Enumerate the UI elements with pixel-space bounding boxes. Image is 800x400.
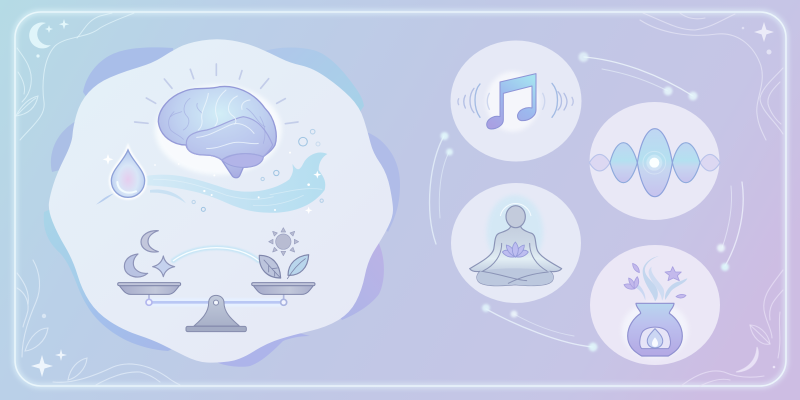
icon: music note xyxy=(458,72,573,132)
corner ornament: bottom left xyxy=(17,260,180,385)
temporal lobe xyxy=(186,117,273,160)
note shape xyxy=(487,74,536,129)
circle: aroma diffuser xyxy=(590,245,720,365)
icon: water wave xyxy=(96,129,327,214)
icon: aroma diffuser xyxy=(622,256,688,358)
scale base xyxy=(186,295,246,332)
wave highlight streaks xyxy=(153,179,322,206)
four-point star xyxy=(153,256,175,277)
flame xyxy=(647,329,663,348)
icon: meditating figure xyxy=(470,195,562,286)
corner ornament: top right xyxy=(640,13,783,140)
connector arrow: wave to diffuser xyxy=(717,182,743,271)
brain folds: highlight xyxy=(197,90,258,148)
left leaf xyxy=(259,255,281,278)
flame core xyxy=(652,337,658,347)
scale arc xyxy=(173,248,258,261)
circle: sound wave xyxy=(590,102,720,220)
drop inner highlight xyxy=(117,182,136,193)
jar xyxy=(628,303,682,356)
brain glow xyxy=(155,85,282,175)
back blob: lower left xyxy=(44,205,190,351)
back blob: upper right xyxy=(262,48,364,140)
left pan xyxy=(118,283,181,294)
leg fill xyxy=(477,268,553,286)
back blob: right xyxy=(350,132,400,232)
icon: brain xyxy=(155,85,282,178)
upper crescent moon xyxy=(141,231,158,252)
icon: balance scale xyxy=(118,228,315,332)
connector arrow: diffuser to meditation xyxy=(482,304,598,352)
back blob: upper left xyxy=(83,47,180,130)
front blob xyxy=(49,39,393,363)
sun xyxy=(269,228,299,256)
connector arrow: meditation to music xyxy=(430,132,453,244)
wave left tail xyxy=(96,193,114,205)
circle: meditation xyxy=(451,183,581,303)
wave center light xyxy=(643,151,666,174)
lower wave wisp xyxy=(150,190,186,203)
brain folds: shadow xyxy=(169,98,265,143)
aura xyxy=(487,195,543,268)
corner ornament: bottom right xyxy=(681,270,783,386)
arm and leg lines xyxy=(482,243,548,283)
note glow xyxy=(486,72,539,132)
diffuser glow xyxy=(622,302,688,358)
steam xyxy=(635,256,687,301)
back blob: left xyxy=(51,121,100,172)
brain body xyxy=(158,86,276,178)
head xyxy=(506,206,525,228)
panel: sleep and brain blob xyxy=(44,39,400,367)
icon: sound wave xyxy=(589,129,720,197)
corner ornament: top left xyxy=(16,13,134,140)
lotus xyxy=(502,242,528,257)
jar opening xyxy=(640,327,670,349)
icon: brain rays xyxy=(135,64,298,124)
beam xyxy=(146,294,287,307)
cerebellum xyxy=(222,154,263,167)
sparkles xyxy=(103,152,321,214)
purple flowers xyxy=(624,263,686,298)
bubbles xyxy=(192,129,323,211)
sound arcs xyxy=(458,83,573,117)
back blob: bottom xyxy=(215,320,310,367)
halo xyxy=(500,204,531,216)
back blob: lower right xyxy=(320,238,384,320)
connector arrow: music to wave xyxy=(578,52,698,100)
body and legs xyxy=(470,226,562,286)
right leaf xyxy=(287,255,309,279)
circle: music xyxy=(450,40,582,162)
right pan xyxy=(252,283,315,294)
wave lenses xyxy=(589,129,720,197)
drop body xyxy=(111,150,145,197)
wave body xyxy=(146,152,327,213)
drop glow xyxy=(111,150,145,197)
lower crescent moon xyxy=(124,254,148,277)
icon: water drop xyxy=(111,150,145,197)
